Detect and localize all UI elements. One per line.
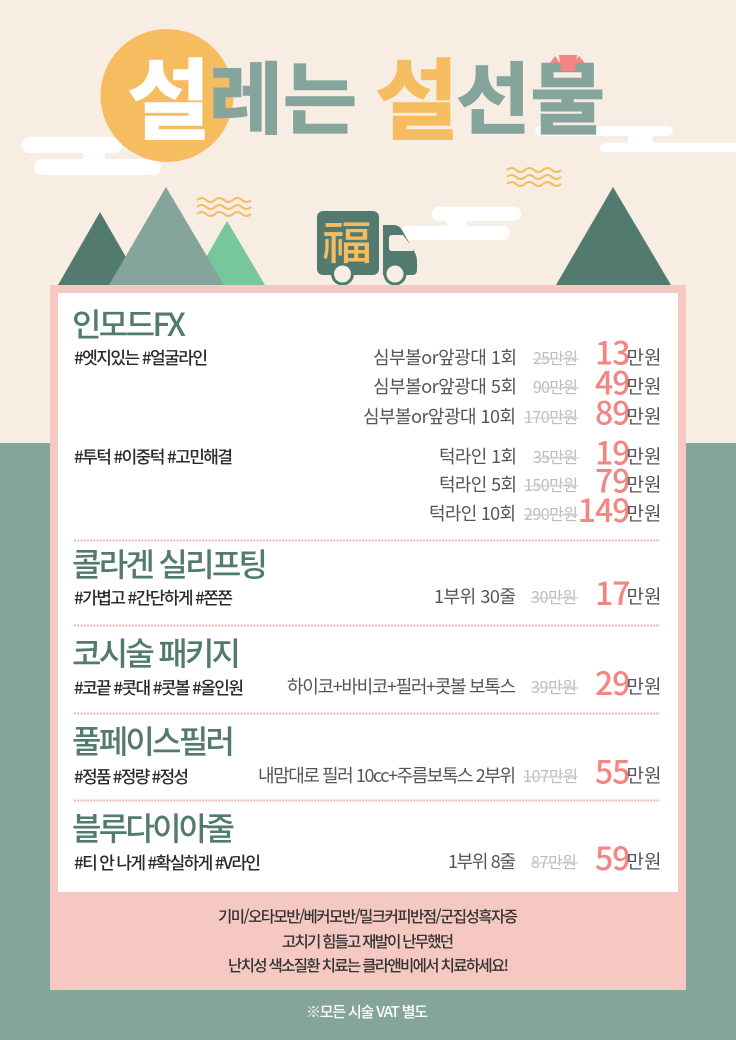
panel: price list white card (58, 293, 678, 892)
icon: gift ribbon (550, 55, 585, 71)
price row: 5회: 90만원 (533, 374, 578, 398)
moon (100, 29, 234, 162)
title: 설 (375, 52, 459, 151)
heading: 콜라겐 실리프팅: 콜라겐 실리프팅 (72, 540, 268, 586)
price row: 1부위 8줄: 1부위 8줄 (448, 848, 516, 874)
mountain: green (190, 221, 265, 285)
panel: price list frame (50, 285, 686, 990)
price row: 하이코 패키지: 만원 (626, 672, 661, 699)
price row: 5회: 만원 (626, 372, 661, 399)
tags: 투턱 이중턱: #투턱 #이중턱 #고민해결 (74, 443, 233, 468)
price row: 턱라인 1회: 19 (595, 428, 630, 474)
price row: 턱라인 5회: 만원 (626, 470, 661, 497)
price row: 내맘대로 필러: 만원 (626, 761, 661, 788)
price row: 하이코 패키지: 39만원 (531, 674, 577, 698)
price row: 1회: 13 (595, 328, 630, 374)
section: 인모드FX (72, 300, 661, 532)
heading: 인모드FX: 인모드FX (72, 300, 186, 346)
price row: 10회: 심부볼or앞광대 10회 (363, 403, 516, 429)
title: 레는 (209, 56, 357, 144)
section: 풀페이스필러 (72, 717, 661, 794)
icon: waves left (197, 198, 251, 216)
price row: 10회: 170만원 (524, 404, 578, 428)
price row: 턱라인 10회: 턱라인 10회 (429, 500, 516, 526)
price row: 턱라인 1회: 만원 (626, 442, 661, 469)
icon: waves right (507, 168, 561, 186)
heading: 풀페이스필러: 풀페이스필러 (72, 717, 235, 763)
section: 콜라겐 실리프팅 (72, 540, 661, 615)
price row: 턱라인 10회: 149 (578, 486, 630, 532)
mountain: grey-green (109, 187, 224, 285)
tags: 티 안 나게: #티 안 나게 #확실하게 #V라인 (74, 849, 261, 874)
text block: treatment description: 난치성 색소질환 치료는 클라앤비에서 치료하세요! (228, 954, 509, 976)
price row: 1부위 8줄: 59 (595, 834, 630, 880)
price row: 1부위 8줄 (448, 834, 661, 880)
price row: 턱라인 5회 (439, 456, 661, 502)
price row: 턱라인 10회: 290만원 (524, 501, 578, 525)
section: 블루다이아줄 (72, 804, 661, 880)
price row: 1회: 만원 (626, 343, 661, 370)
price row: 10회: 89 (595, 388, 630, 434)
price row: 하이코 패키지: 하이코+바비코+필러+콧볼 보톡스 (287, 673, 516, 699)
icon: truck (317, 207, 417, 286)
cloud: middle (400, 207, 521, 240)
price row: 1부위 30줄: 만원 (626, 582, 661, 609)
mountain: dark right (556, 187, 671, 285)
price row: 턱라인 1회: 턱라인 1회 (439, 443, 517, 469)
cloud: left (22, 137, 161, 175)
cloud: right (535, 126, 736, 152)
tags: 정품: #정품 #정량 #정성 (74, 763, 189, 788)
price row: 10회 (363, 388, 661, 434)
text block: treatment description (218, 905, 518, 976)
title (127, 52, 605, 151)
price row: 10회: 만원 (626, 402, 661, 429)
price row: 5회 (373, 358, 661, 404)
price row: 내맘대로 필러: 55 (595, 748, 630, 794)
price row: 1부위 8줄: 만원 (626, 847, 661, 874)
section: 코시술 패키지 (72, 629, 661, 705)
footnote: VAT: ※모든 시술 VAT 별도 (306, 1001, 428, 1022)
price row: 하이코 패키지: 29 (595, 659, 630, 705)
price row: 1회 (373, 328, 661, 374)
price row: 1부위 8줄: 87만원 (531, 849, 577, 873)
price row: 1부위 30줄: 17 (595, 569, 630, 615)
price row: 1부위 30줄: 1부위 30줄 (434, 583, 516, 609)
price row: 1회: 25만원 (533, 345, 578, 369)
icon: truck: 福 (322, 207, 372, 273)
heading: 블루다이아줄: 블루다이아줄 (72, 804, 235, 850)
text block: treatment description: 기미/오타모반/베커모반/밀크커피반점/군집성흑자증 (218, 905, 518, 927)
price row: 턱라인 1회: 35만원 (533, 444, 578, 468)
price row: 턱라인 5회: 79 (595, 456, 630, 502)
price row: 턱라인 10회 (429, 486, 661, 532)
tags: 코끝: #코끝 #콧대 #콧볼 #올인원 (74, 674, 244, 699)
title: 선물 (456, 56, 605, 144)
price row: 내맘대로 필러: 내맘대로 필러 10cc+주름보톡스 2부위 (258, 762, 516, 788)
price row: 턱라인 10회: 만원 (626, 499, 661, 526)
tags: 가볍고: #가볍고 #간단하게 #쫀쫀 (74, 584, 233, 609)
price row: 내맘대로 필러: 107만원 (523, 763, 578, 787)
price row: 하이코 패키지 (287, 659, 661, 705)
price row: 턱라인 5회: 150만원 (524, 472, 578, 496)
price row: 턱라인 5회: 턱라인 5회 (439, 471, 517, 497)
mountain: dark left (58, 212, 142, 285)
price row: 내맘대로 필러 (258, 748, 661, 794)
price row: 1부위 30줄 (434, 569, 661, 615)
price row: 턱라인 1회 (439, 428, 661, 474)
text block: treatment description: 고치기 힘들고 재발이 난무했던 (282, 930, 454, 952)
tags: 엣지 얼굴라인: #엣지있는 #얼굴라인 (74, 344, 208, 369)
title: 설 (127, 52, 211, 151)
heading: 코시술 패키지: 코시술 패키지 (72, 629, 241, 675)
price row: 1회: 심부볼or앞광대 1회 (373, 344, 517, 370)
price row: 5회: 49 (595, 358, 630, 404)
price row: 5회: 심부볼or앞광대 5회 (373, 373, 517, 399)
price row: 1부위 30줄: 30만원 (531, 584, 577, 608)
